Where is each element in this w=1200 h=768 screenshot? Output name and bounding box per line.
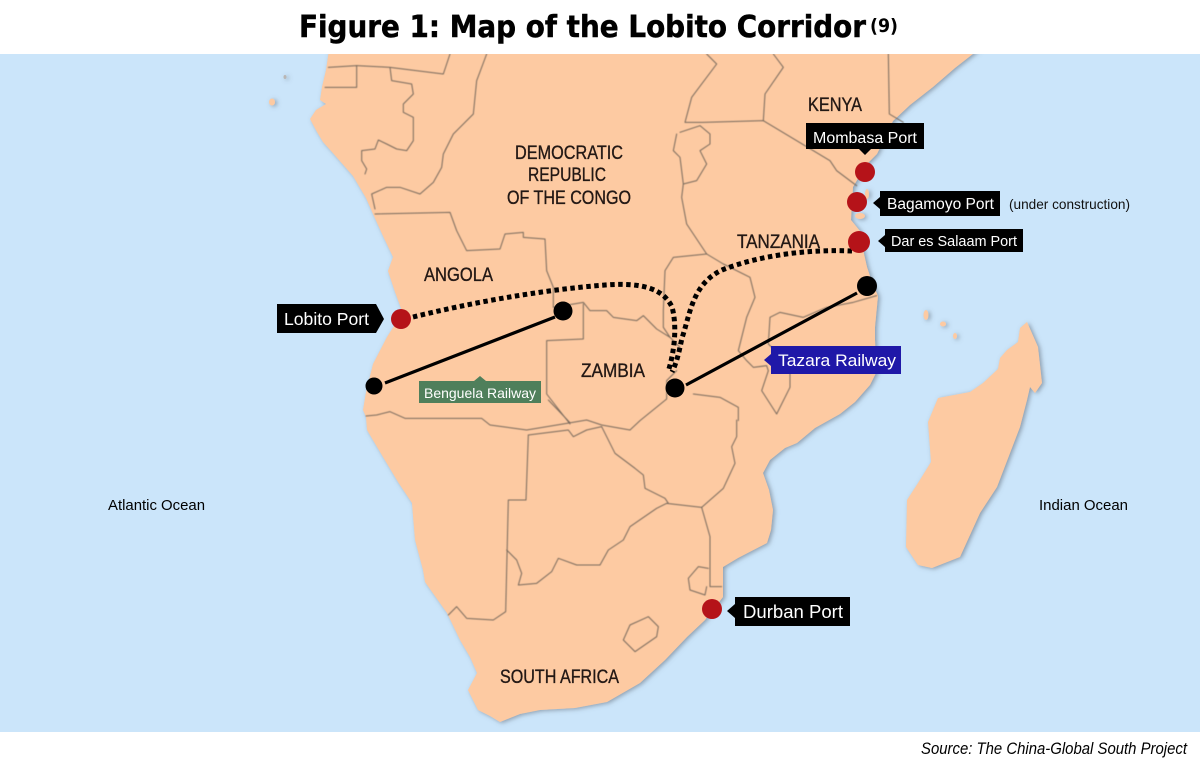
label: Democratic Republic of the Congo: DEMOCRATIC [515,143,623,164]
country labels [424,95,862,688]
title: Figure 1: Map of the Lobito Corridor [299,10,866,45]
red port markers [391,162,875,619]
label: Angola: ANGOLA [424,265,493,286]
black railway nodes [366,276,877,398]
callout: Mombasa Port [806,123,924,155]
label: Democratic Republic of the Congo: REPUBLIC [528,165,606,186]
callout: Tazara Railway [764,346,901,374]
callout: Tazara Railway: Tazara Railway [778,351,897,370]
title: (9) [870,15,898,37]
callout: Durban Port: Durban Port [743,601,843,622]
label: Tanzania: TANZANIA [737,232,820,253]
solid line: Tazara Railway [686,293,857,385]
callout: Bagamoyo Port: Bagamoyo Port [887,196,995,213]
islands [269,75,957,339]
label: Democratic Republic of the Congo: OF THE CONGO [507,188,631,209]
label: Zambia: ZAMBIA [581,361,645,382]
land: African continent [310,50,978,722]
label: South Africa: SOUTH AFRICA [500,667,619,688]
label: Indian Ocean: Indian Ocean [1039,497,1128,514]
callout: Benguela Railway: Benguela Railway [424,385,536,401]
borders: east Africa [685,54,903,421]
solid line: Benguela Railway [385,317,555,383]
land: Madagascar [906,322,1042,568]
callout: Mombasa Port: Mombasa Port [813,130,918,147]
label: Atlantic Ocean: Atlantic Ocean [108,498,205,514]
dotted route: Lobito to Zambia [413,284,675,372]
dotted route: Dar es Salaam to Zambia [672,251,852,372]
national borders [325,54,903,652]
callout: Lobito Port [277,304,384,333]
borders: southern Africa [366,400,737,652]
callout: Bagamoyo Port [873,191,1000,216]
callout: Dar es Salaam Port: Dar es Salaam Port [891,234,1017,250]
label: Kenya: KENYA [808,95,862,116]
note: under construction: (under construction) [1009,197,1130,212]
borders: west and central Africa [325,54,710,430]
callout: Dar es Salaam Port [878,229,1023,252]
callout: Benguela Railway [419,376,541,403]
callout: Durban Port [727,597,850,626]
callout: Lobito Port: Lobito Port [284,309,369,329]
label: Democratic Republic of the Congo [507,143,631,209]
map of southern Africa [269,50,1042,722]
